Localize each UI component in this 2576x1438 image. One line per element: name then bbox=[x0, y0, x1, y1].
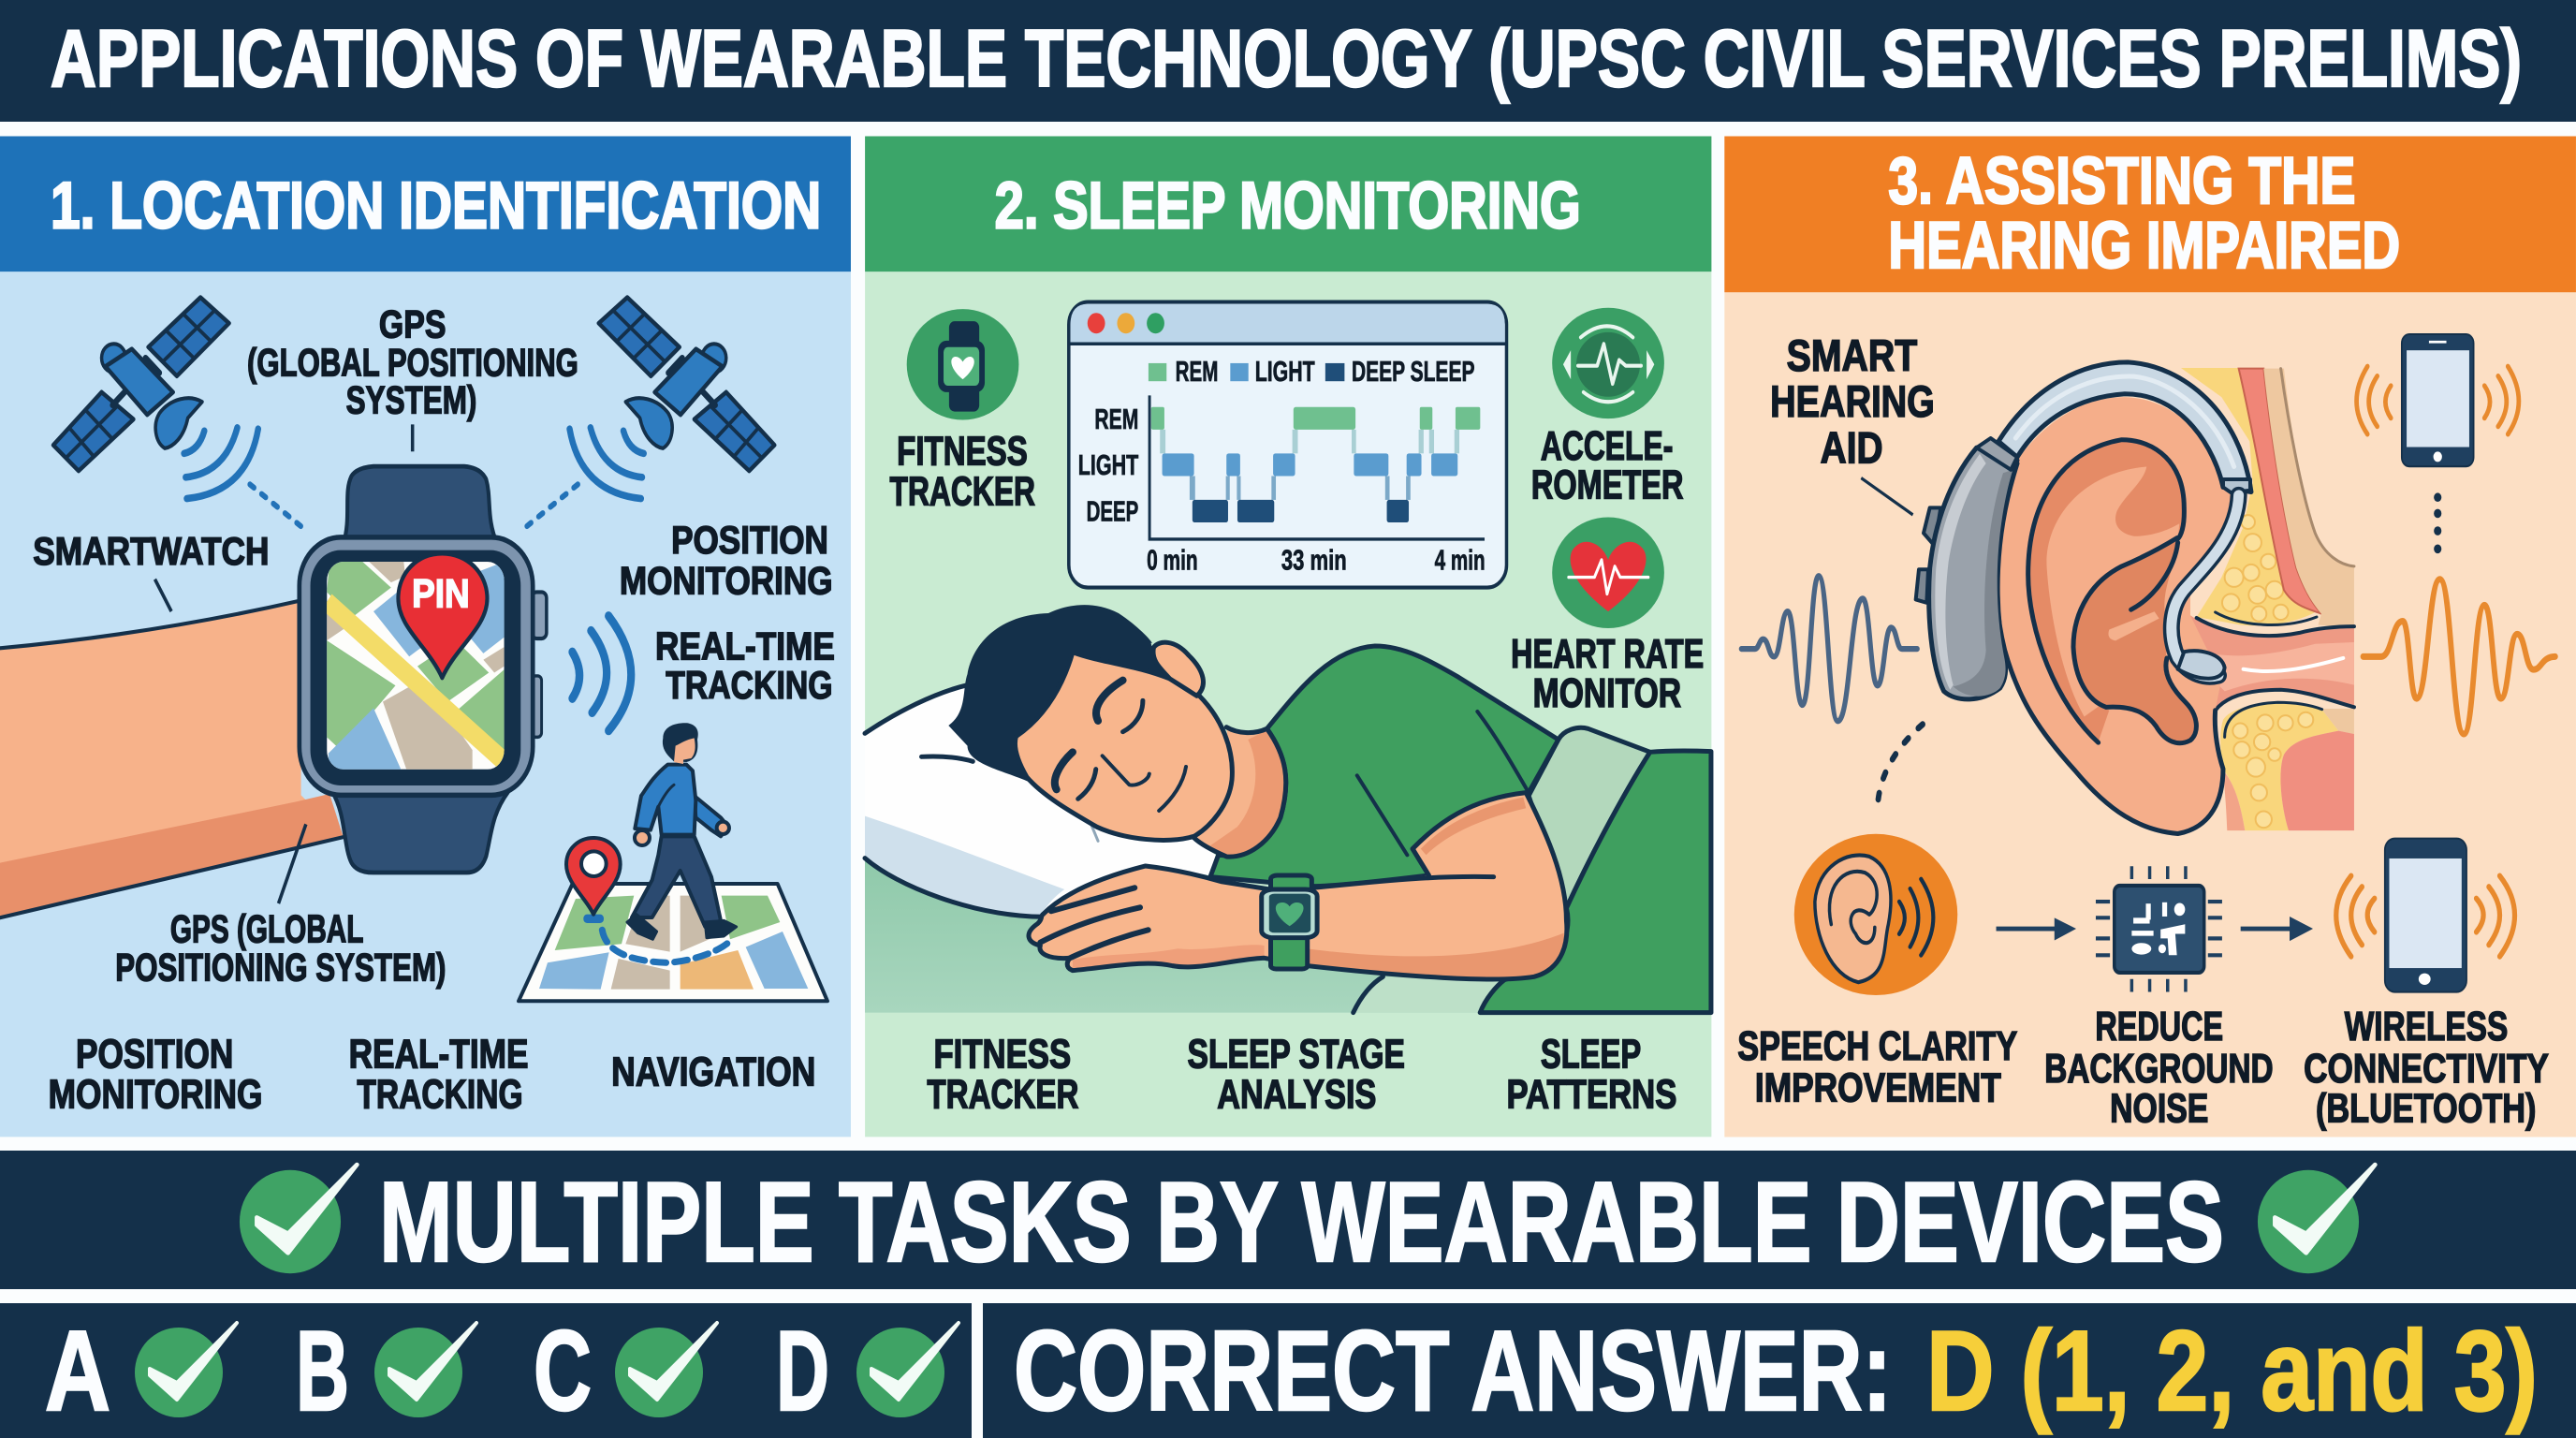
label: smart hearing aid: AID bbox=[1821, 425, 1883, 474]
label: navigation: NAVIGATION bbox=[611, 1049, 815, 1094]
panel 1 heading: 1. LOCATION IDENTIFICATION bbox=[51, 169, 821, 242]
label: GPS top: (GLOBAL POSITIONING bbox=[247, 342, 578, 385]
shirt bbox=[1210, 646, 1559, 887]
icon: speech clarity ear bbox=[1794, 834, 1957, 995]
chart: sleep stages window: LIGHT bbox=[1255, 356, 1315, 388]
blanket bbox=[1354, 727, 1711, 1013]
icon: signal waves bbox=[572, 616, 631, 730]
icon: wireless phone bottom bbox=[2336, 839, 2515, 992]
label: fitness tracker bottom: FITNESS bbox=[933, 1032, 1071, 1077]
pillow bbox=[865, 685, 1216, 917]
label: wireless connectivity: WIRELESS bbox=[2345, 1004, 2508, 1049]
dotted link: aid to speech clarity bbox=[1878, 725, 1923, 812]
label: GPS top: SYSTEM) bbox=[346, 379, 476, 422]
icon: smartwatch with map bbox=[300, 466, 547, 873]
label: position monitoring bottom: MONITORING bbox=[49, 1072, 262, 1117]
sound wave output bbox=[2364, 580, 2555, 734]
label: real-time tracking right: REAL-TIME bbox=[655, 625, 835, 668]
label: position monitoring bottom bbox=[49, 1032, 262, 1117]
ear anatomy cross-section bbox=[2181, 368, 2354, 830]
arrow to phone bbox=[2241, 917, 2313, 941]
chart: sleep stages window bbox=[1069, 302, 1506, 588]
label: speech clarity improvement bbox=[1737, 1023, 2017, 1110]
label: real-time tracking bottom: REAL-TIME bbox=[349, 1032, 529, 1077]
icon: smartwatch with map: PIN bbox=[412, 572, 470, 616]
label: heart rate monitor: HEART RATE bbox=[1511, 631, 1704, 677]
illustration: ear with hearing aid bbox=[1916, 362, 2354, 834]
label: sleep patterns: PATTERNS bbox=[1506, 1072, 1676, 1117]
correct answer bbox=[983, 1303, 2576, 1438]
panel: sleep monitoring bbox=[865, 137, 1711, 1137]
label: speech clarity improvement: SPEECH CLARITY bbox=[1737, 1023, 2017, 1069]
hearing aid device bbox=[1916, 362, 2251, 699]
facial features bbox=[1055, 681, 1186, 811]
label: fitness tracker bbox=[890, 429, 1035, 514]
chart: sleep stages window: LIGHT bbox=[1078, 449, 1138, 481]
option C bbox=[534, 1307, 717, 1434]
label: speech clarity improvement: IMPROVEMENT bbox=[1755, 1065, 2001, 1110]
label: accelerometer bbox=[1531, 423, 1683, 507]
label: reduce background noise: BACKGROUND bbox=[2044, 1046, 2274, 1092]
label: GPS lower: GPS (GLOBAL bbox=[170, 908, 363, 951]
chart: sleep stages window: DEEP bbox=[1087, 496, 1138, 527]
panel 3 heading bbox=[1724, 137, 2576, 292]
option B: B bbox=[296, 1307, 349, 1434]
label: smart hearing aid: HEARING bbox=[1770, 378, 1935, 427]
label: real-time tracking bottom: TRACKING bbox=[357, 1072, 523, 1117]
map sheet bbox=[519, 884, 827, 1001]
illustration: map with walking person bbox=[519, 723, 827, 1001]
panel: location identification bbox=[0, 137, 851, 1137]
label: wireless connectivity: CONNECTIVITY bbox=[2304, 1046, 2549, 1092]
chart: sleep stages window: 4 min bbox=[1435, 544, 1486, 576]
label: heart rate monitor bbox=[1511, 631, 1704, 716]
label: sleep patterns bbox=[1506, 1032, 1676, 1117]
sound wave input bbox=[1741, 576, 1917, 721]
label: heart rate monitor: MONITOR bbox=[1533, 670, 1681, 716]
label: position monitoring right bbox=[620, 519, 833, 603]
icon: walking person bbox=[627, 723, 737, 939]
label: accelerometer: ROMETER bbox=[1531, 462, 1683, 507]
icon: right satellite bbox=[521, 298, 774, 531]
panel 2 heading bbox=[865, 137, 1711, 271]
label: fitness tracker: TRACKER bbox=[890, 469, 1035, 514]
icon: left satellite bbox=[53, 298, 306, 531]
label: real-time tracking bottom bbox=[349, 1032, 529, 1117]
label: smart hearing aid bbox=[1770, 332, 1935, 515]
panel 3 heading: 3. ASSISTING THE bbox=[1888, 143, 2355, 217]
label: GPS top bbox=[247, 303, 578, 451]
hair bbox=[948, 605, 1170, 784]
illustration: sleeping person bbox=[865, 605, 1711, 1013]
label: reduce background noise bbox=[2044, 1004, 2274, 1131]
label: real-time tracking right: TRACKING bbox=[666, 664, 833, 708]
correct answer: CORRECT ANSWER: bbox=[1014, 1307, 1892, 1434]
label: reduce background noise: REDUCE bbox=[2095, 1004, 2223, 1049]
icon: accelerometer bbox=[1552, 308, 1664, 418]
chart: sleep stages window: REM bbox=[1176, 356, 1218, 388]
panel 1 heading bbox=[0, 137, 851, 271]
label: wireless connectivity bbox=[2304, 1004, 2549, 1131]
chart: sleep stages window: 0 min bbox=[1147, 544, 1198, 576]
arrow to chip bbox=[1997, 917, 2076, 940]
ear bbox=[1153, 642, 1203, 696]
label: GPS lower: POSITIONING SYSTEM) bbox=[115, 946, 446, 990]
label: wireless connectivity: (BLUETOOTH) bbox=[2316, 1086, 2536, 1131]
dotted link: phone to wave bbox=[2434, 492, 2441, 553]
icon: heart rate bbox=[1552, 518, 1664, 628]
bed sheet bbox=[865, 858, 1566, 1013]
label: fitness tracker bottom bbox=[927, 1032, 1078, 1117]
option D: D bbox=[776, 1307, 829, 1434]
option C: C bbox=[534, 1307, 592, 1434]
outer ear bbox=[1997, 397, 2234, 834]
chart: sleep stages window: REM bbox=[1094, 404, 1138, 435]
neck bbox=[1194, 727, 1286, 857]
panel 3 heading: HEARING IMPAIRED bbox=[1888, 208, 2400, 282]
option A bbox=[45, 1307, 237, 1434]
arm bbox=[0, 600, 344, 917]
label: fitness tracker bottom: TRACKER bbox=[927, 1072, 1078, 1117]
option A: A bbox=[45, 1307, 110, 1434]
label: smartwatch: SMARTWATCH bbox=[33, 530, 270, 573]
icon: noise reduction chip bbox=[2096, 866, 2222, 992]
label: GPS top: GPS bbox=[379, 303, 446, 346]
label: position monitoring right: POSITION bbox=[671, 519, 828, 563]
label: sleep stage analysis bbox=[1188, 1032, 1405, 1117]
label: sleep patterns: SLEEP bbox=[1541, 1032, 1641, 1077]
icon: smartphone top bbox=[2357, 334, 2519, 466]
label: accelerometer: ACCELE- bbox=[1541, 423, 1673, 469]
label: reduce background noise: NOISE bbox=[2110, 1086, 2208, 1131]
label: fitness tracker: FITNESS bbox=[897, 429, 1028, 474]
wrist fitness band bbox=[1262, 875, 1317, 969]
label: smartwatch bbox=[33, 530, 270, 611]
label: sleep stage analysis: SLEEP STAGE bbox=[1188, 1032, 1405, 1077]
panel 2 heading: 2. SLEEP MONITORING bbox=[995, 169, 1581, 242]
label: smart hearing aid: SMART bbox=[1787, 332, 1917, 381]
label: position monitoring right: MONITORING bbox=[620, 560, 833, 603]
label: real-time tracking right bbox=[655, 625, 835, 708]
option D bbox=[776, 1307, 959, 1434]
label: position monitoring bottom: POSITION bbox=[76, 1032, 233, 1077]
label: GPS lower bbox=[115, 824, 446, 990]
icon: check right bbox=[2258, 1165, 2375, 1273]
icon: map pin bbox=[566, 838, 621, 915]
option B bbox=[296, 1307, 476, 1434]
label: sleep stage analysis: ANALYSIS bbox=[1217, 1072, 1376, 1117]
panel: assisting the hearing impaired bbox=[1724, 137, 2576, 1137]
icon: check left bbox=[240, 1165, 357, 1273]
chart: sleep stages window: 33 min bbox=[1281, 544, 1347, 576]
chart: sleep stages window: DEEP SLEEP bbox=[1352, 356, 1474, 388]
icon: fitness tracker bbox=[907, 309, 1018, 420]
options row bbox=[0, 1303, 972, 1438]
face bbox=[1015, 653, 1232, 840]
arm and hand bbox=[1029, 793, 1567, 979]
